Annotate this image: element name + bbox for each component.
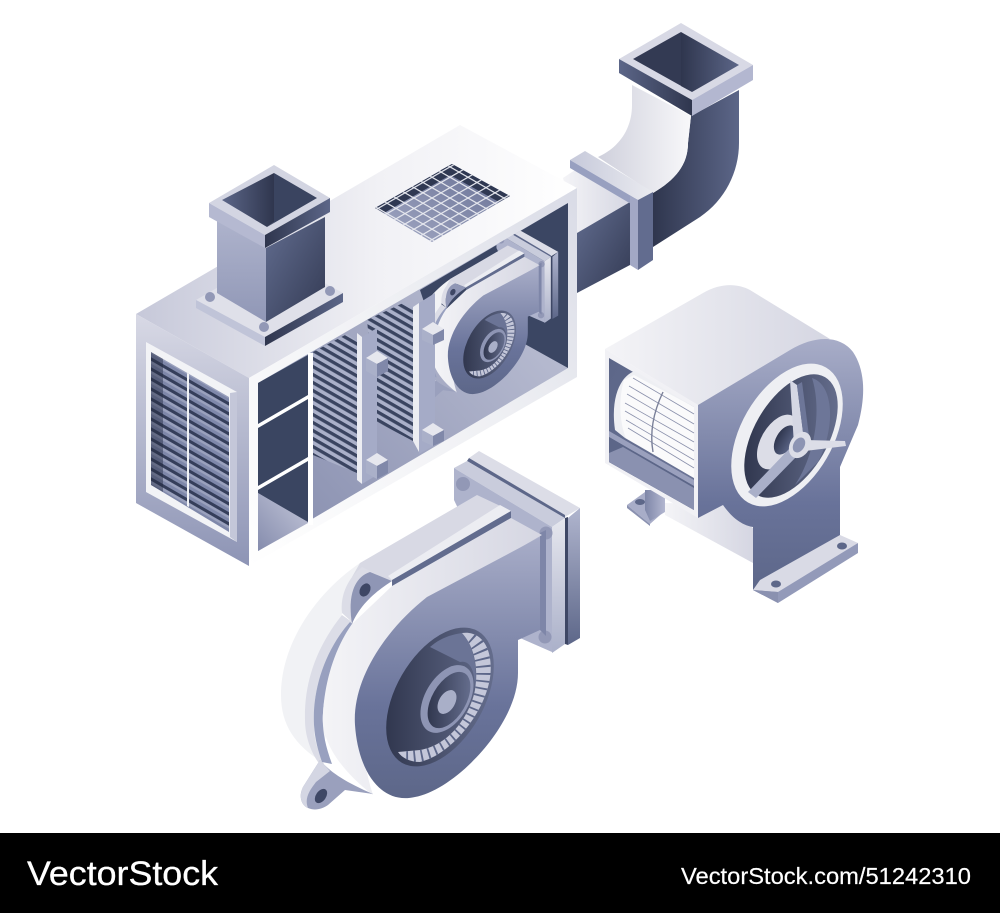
cabinet top face (136, 125, 577, 378)
stack top flange (209, 165, 330, 248)
brand name: VectorStock (27, 855, 219, 893)
centrifugal fan on stand (605, 285, 866, 603)
cabinet left face (136, 314, 249, 566)
inlet wheel ring (708, 344, 866, 526)
rear foot (627, 490, 668, 526)
large blower fan (281, 451, 580, 809)
elbow duct (563, 23, 753, 293)
interior floor (258, 203, 568, 551)
mounting feet (753, 535, 858, 603)
stack base plate (196, 255, 343, 346)
housing side with intake (605, 349, 698, 518)
scroll housing face (698, 339, 863, 590)
post bracket knobs (366, 322, 444, 479)
curved pipe light side (598, 85, 691, 193)
top square flange (619, 23, 753, 116)
image url: VectorStock.com/51242310 (681, 863, 971, 889)
fan compartment end wall (420, 203, 568, 368)
wheel spokes (748, 380, 846, 498)
curved pipe dark side (653, 90, 739, 247)
left compartment with shelves (258, 353, 313, 551)
mesh vent on top (375, 164, 510, 242)
footer watermark bar (0, 833, 1000, 913)
housing top (605, 285, 830, 405)
first filter panel (313, 328, 377, 484)
straight duct section (563, 170, 630, 293)
intake opening (609, 358, 694, 510)
cabinet front frame (249, 188, 577, 566)
duct collar (570, 151, 653, 270)
louvered intake grille (146, 342, 237, 542)
blower inside the cabinet (432, 230, 558, 397)
stack body (217, 217, 325, 322)
exhaust stack on cabinet (196, 165, 343, 346)
intake shelf (609, 431, 694, 486)
second filter panel (367, 293, 435, 454)
air handling unit cabinet (136, 125, 577, 566)
white underbody (665, 503, 753, 563)
drum impeller (614, 371, 694, 478)
